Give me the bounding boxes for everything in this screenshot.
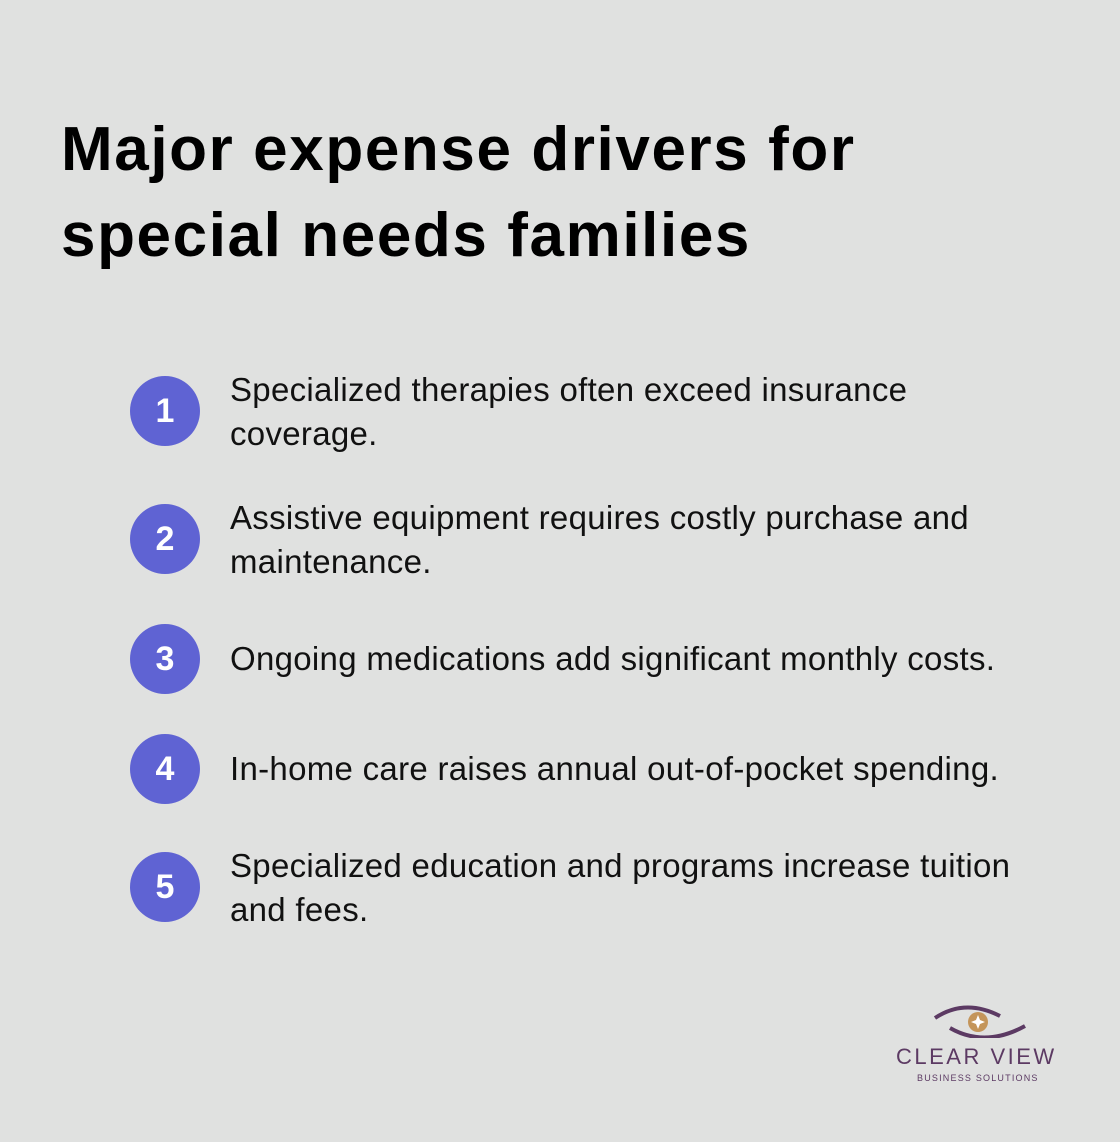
item 3 bbox=[130, 624, 995, 694]
item 4: 4 bbox=[156, 750, 174, 788]
item 5: Specialized education and programs increase tuition and fees. bbox=[230, 847, 1010, 928]
title: special needs families bbox=[61, 201, 751, 270]
item 3: 3 bbox=[156, 640, 174, 678]
item 1: 1 bbox=[156, 392, 174, 430]
logo bbox=[896, 1006, 1057, 1083]
logo: CLEAR VIEW bbox=[896, 1044, 1057, 1069]
item 4 bbox=[130, 734, 999, 804]
item 4: In-home care raises annual out-of-pocket spending. bbox=[230, 750, 999, 787]
title bbox=[61, 115, 856, 270]
item 1: Specialized therapies often exceed insurance coverage. bbox=[230, 371, 907, 452]
title: Major expense drivers for bbox=[61, 115, 856, 184]
item 5: 5 bbox=[156, 868, 174, 906]
logo: BUSINESS SOLUTIONS bbox=[917, 1073, 1039, 1083]
item 2: Assistive equipment requires costly purchase and maintenance. bbox=[230, 499, 969, 580]
item 3: Ongoing medications add significant monthly costs. bbox=[230, 640, 995, 677]
item 2: 2 bbox=[156, 520, 174, 558]
